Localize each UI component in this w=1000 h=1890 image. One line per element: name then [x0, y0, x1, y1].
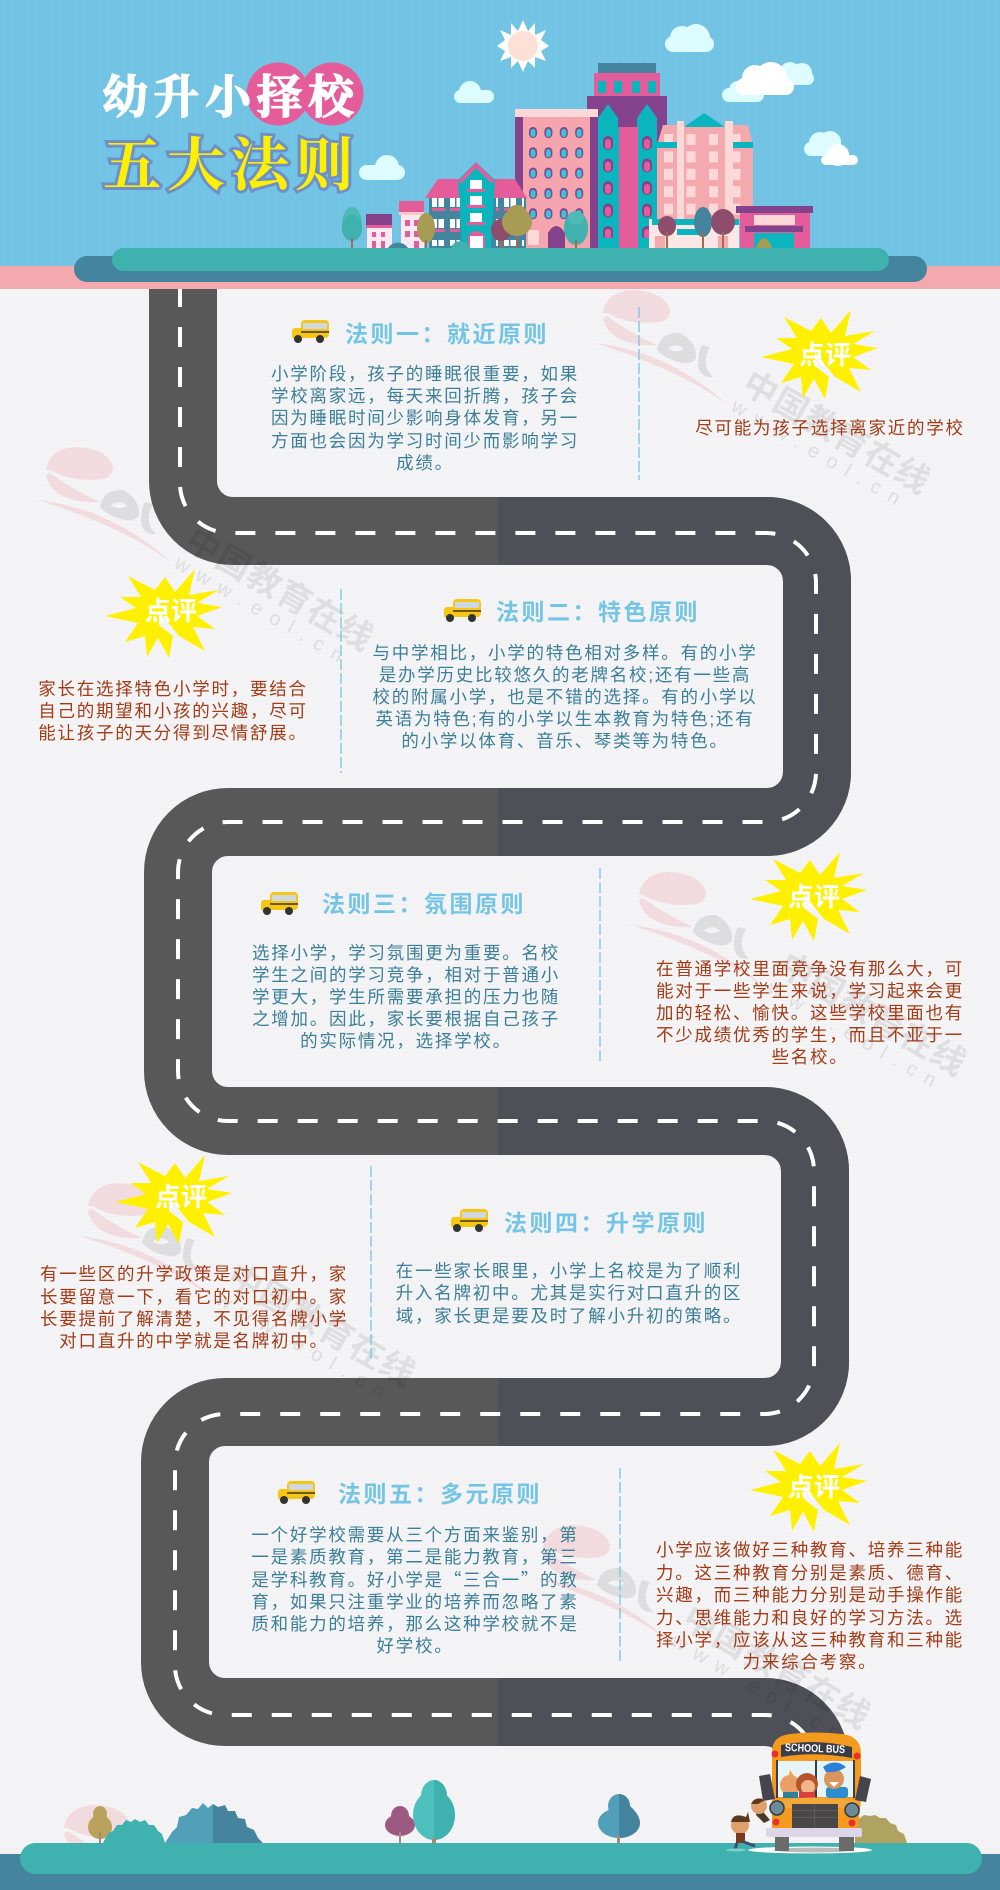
- body text: 选择小学，学习氛围更为重要。名校: [252, 943, 560, 963]
- comment text: 自己的期望和小孩的兴趣，尽可: [38, 701, 308, 721]
- body text: 之增加。因此，家长要根据自己孩子: [252, 1009, 560, 1029]
- divider: [619, 1468, 621, 1663]
- olive tree: [88, 1806, 112, 1843]
- comment text: [656, 1540, 964, 1672]
- comment text: 能对于一些学生来说，学习起来会更: [656, 981, 964, 1001]
- watermark 1: [595, 290, 937, 515]
- body text: 学更大，学生所需要承担的压力也随: [252, 987, 560, 1007]
- comment text: 不少成绩优秀的学生，而且不亚于一: [656, 1025, 964, 1045]
- body text: 是办学历史比较悠久的老牌名校;还有一些高: [379, 665, 751, 685]
- comment text: 家长在选择特色小学时，要结合: [38, 679, 308, 699]
- bus bumper: [766, 1828, 862, 1837]
- watermark 6: [64, 1805, 130, 1843]
- heading: 法则三：氛围原则: [322, 891, 526, 917]
- divider: [638, 307, 640, 480]
- comment text: 择小学，应该从这三种教育和三种能: [656, 1630, 964, 1650]
- header: ground platform: [74, 248, 927, 282]
- body text: 一个好学校需要从三个方面来鉴别，第: [251, 1525, 579, 1545]
- comment text: 对口直升的中学就是名牌初中。: [59, 1331, 329, 1351]
- body text: [252, 943, 560, 1051]
- footer: ground: [0, 1843, 1000, 1890]
- heading: 法则二：特色原则: [496, 599, 700, 625]
- label: 点评: [788, 1472, 840, 1502]
- body text: 升入名牌初中。尤其是实行对口直升的区: [396, 1283, 742, 1303]
- blue tree: [598, 1794, 640, 1843]
- body text: 与中学相比，小学的特色相对多样。有的小学: [372, 643, 758, 663]
- bus passengers: [780, 1762, 848, 1798]
- body text: 是学科教育。好小学是“三合一”的教: [251, 1567, 579, 1592]
- body text: [251, 1525, 579, 1656]
- title line 1: 幼升小择校: [102, 72, 360, 123]
- panel: rule 3: [252, 891, 560, 1051]
- small white-pink building: [399, 201, 424, 248]
- body text: 成绩。: [396, 453, 454, 473]
- kid leaning out: [751, 1798, 770, 1823]
- bus windows: [777, 1761, 815, 1797]
- label: 点评: [799, 340, 851, 370]
- panel: comment 5: [656, 1443, 964, 1672]
- header: sky band: [0, 0, 1000, 266]
- divider: [340, 589, 342, 773]
- watermark 3: www.eol.cn: [763, 977, 949, 1097]
- watermark 1: www.eol.cn: [727, 395, 913, 515]
- body text: [372, 643, 758, 751]
- heading: 法则四：升学原则: [504, 1210, 708, 1236]
- panel: comment 4: [40, 1155, 348, 1351]
- starburst: [761, 310, 878, 398]
- school bus illustration: [726, 1732, 872, 1854]
- bus mirrors: [759, 1774, 775, 1801]
- header trees: [342, 205, 735, 248]
- icon: bus: [261, 892, 298, 915]
- body text: 的实际情况，选择学校。: [300, 1031, 512, 1051]
- panel: rule 4: [396, 1209, 742, 1326]
- label: 点评: [155, 1182, 207, 1212]
- watermark 3: [631, 872, 973, 1097]
- body text: [396, 1261, 742, 1326]
- body text: 方面也会因为学习时间少而影响学习: [271, 431, 579, 451]
- comment text: [38, 679, 308, 743]
- watermark 2: 中国教育在线: [179, 521, 380, 659]
- panel: rule 2: [372, 599, 758, 751]
- road: [175, 289, 817, 1790]
- tower top: [587, 63, 667, 156]
- body text: 校的附属小学，也是不错的选择。有的小学以: [372, 687, 758, 707]
- comment text: [656, 959, 964, 1067]
- teal house: [425, 162, 527, 248]
- icon: bus: [444, 599, 481, 622]
- starburst: [750, 1443, 867, 1531]
- label: 点评: [145, 596, 197, 626]
- footer: trees and bushes: [88, 1780, 907, 1843]
- body text: 域，家长更是要及时了解小升初的策略。: [396, 1306, 742, 1326]
- small pink shop: [736, 206, 813, 248]
- comment text: [40, 1264, 348, 1351]
- watermark 5: 中国教育在线: [676, 1599, 877, 1737]
- plum tree: [385, 1806, 415, 1843]
- bus lights: [770, 1801, 784, 1815]
- watermark 1: 中国教育在线: [736, 364, 937, 502]
- watermark 3: 中国教育在线: [772, 946, 973, 1084]
- teal tower: [598, 104, 657, 248]
- comment text: 小学应该做好三种教育、培养三种能: [656, 1540, 964, 1560]
- body text: 学校离家远，每天来回折腾，孩子会: [271, 386, 579, 406]
- body text: 在一些家长眼里，小学上名校是为了顺利: [396, 1261, 742, 1281]
- watermark 4: [80, 1183, 422, 1408]
- body text: 的小学以体育、音乐、琴类等为特色。: [401, 731, 729, 751]
- comment text: 力。这三种教育分别是素质、德育、: [656, 1563, 964, 1583]
- icon: sun: [497, 20, 549, 72]
- body text: 因为睡眠时间少影响身体发育，另一: [271, 408, 579, 428]
- right pink building: [657, 113, 753, 220]
- clouds: [359, 24, 858, 180]
- panel: comment 3: [656, 852, 964, 1067]
- kid running: [726, 1812, 755, 1852]
- icon: bus: [451, 1209, 488, 1232]
- starburst: [750, 852, 867, 940]
- olive bush: [855, 1815, 907, 1843]
- title line 2: 五大法则: [103, 133, 359, 198]
- heading: 法则一：就近原则: [345, 321, 549, 347]
- watermark 2: www.eol.cn: [170, 552, 356, 672]
- comment text: 力、思维能力和良好的学习方法。选: [656, 1608, 964, 1628]
- starburst: [115, 1155, 232, 1243]
- icon: bus: [278, 1481, 315, 1504]
- comment text: 加的轻松、愉快。这些学校里面也有: [656, 1003, 964, 1023]
- comment text: 能让孩子的天分得到尽情舒展。: [38, 723, 308, 743]
- body text: 育，如果只注重学业的培养而忽略了素: [251, 1592, 579, 1612]
- panel: comment 2: [38, 569, 308, 743]
- panel: rule 5: [251, 1481, 579, 1656]
- body text: 质和能力的培养，那么这种学校就不是: [251, 1614, 579, 1634]
- teal bush: [103, 1819, 165, 1843]
- watermark 5: [535, 1525, 877, 1750]
- heading: 法则五：多元原则: [338, 1481, 542, 1507]
- body text: 小学阶段，孩子的睡眠很重要，如果: [271, 364, 579, 384]
- pink building: [515, 109, 598, 248]
- divider: [599, 868, 601, 1063]
- buildings: [342, 63, 813, 248]
- comment text: 些名校。: [772, 1047, 848, 1067]
- body text: 英语为特色;有的小学以生本教育为特色;还有: [376, 709, 754, 729]
- small purple-roof building: [366, 214, 392, 248]
- icon: bus: [292, 320, 329, 343]
- body text: 好学校。: [376, 1636, 454, 1656]
- header: pink band: [0, 266, 1000, 289]
- comment text: 兴趣，而三种能力分别是动手操作能: [656, 1585, 964, 1605]
- body text: 一是素质教育，第二是能力教育，第三: [251, 1547, 579, 1567]
- bus grille: [792, 1804, 838, 1828]
- body text: 学生之间的学习竞争，相对于普通小: [252, 965, 560, 985]
- comment text: 尽可能为孩子选择离家近的学校: [695, 418, 965, 438]
- comment text: 长要留意一下，看它的对口初中。家: [40, 1287, 348, 1307]
- divider: [370, 1166, 372, 1362]
- label: 点评: [788, 882, 840, 912]
- panel: comment 1: [695, 310, 965, 438]
- watermark 5: www.eol.cn: [667, 1630, 853, 1750]
- bus body: [772, 1732, 861, 1828]
- blue bush: [165, 1803, 263, 1843]
- watermarks: [38, 290, 973, 1890]
- comment text: 在普通学校里面竞争没有那么大，可: [656, 959, 964, 979]
- comment text: 长要提前了解清楚，不见得名牌小学: [40, 1309, 348, 1329]
- title badges: [246, 62, 364, 126]
- bus sign: SCHOOL BUS: [785, 1742, 845, 1756]
- panel: rule 1: [271, 320, 579, 473]
- watermark 4: 中国教育在线: [221, 1257, 422, 1395]
- body text: [271, 364, 579, 473]
- starburst: [105, 569, 222, 657]
- teal tree: [413, 1780, 455, 1843]
- watermark 2: [38, 447, 380, 672]
- title: [102, 62, 364, 198]
- comment text: 力来综合考察。: [743, 1652, 877, 1672]
- watermark 4: www.eol.cn: [212, 1288, 398, 1408]
- comment text: 有一些区的升学政策是对口直升，家: [40, 1264, 348, 1284]
- low building: [649, 219, 739, 248]
